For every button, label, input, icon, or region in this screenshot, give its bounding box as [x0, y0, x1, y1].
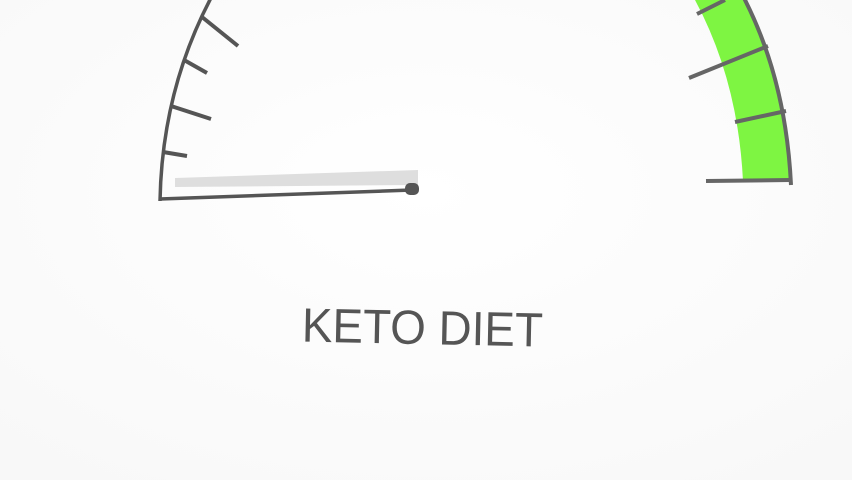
- gauge left arc with ticks: [160, 0, 238, 201]
- gauge right green zone with ticks: [689, 0, 791, 185]
- needle: [160, 170, 419, 199]
- title: KETO DIET: KETO DIET: [301, 299, 543, 358]
